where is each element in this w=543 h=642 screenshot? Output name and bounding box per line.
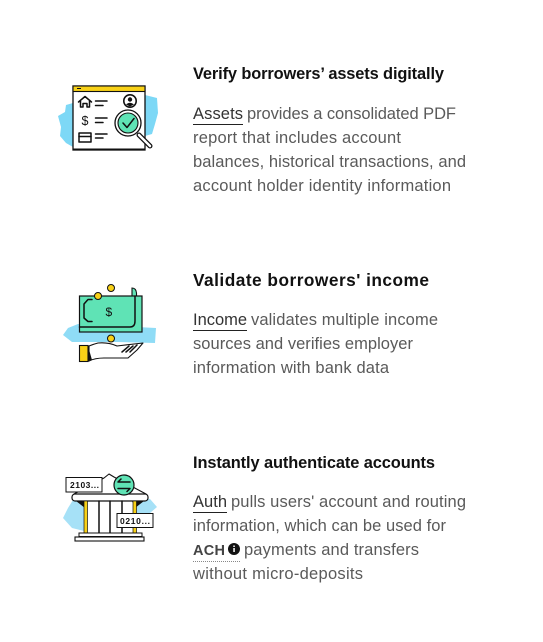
icon: bank with transfer: 2103...: [70, 480, 99, 490]
text block: assets: balances, historical transactions, and: [193, 153, 466, 171]
text block: income: Income: [193, 311, 247, 329]
panel: income: [63, 270, 438, 377]
text block: auth: Auth: [193, 493, 227, 511]
panel: assets: [58, 65, 466, 195]
heading: auth: Instantly authenticate accounts: [193, 454, 435, 472]
text block: auth: information, which can be used for: [193, 517, 446, 535]
text block: assets: report that includes account: [193, 129, 401, 147]
text block: assets: [193, 105, 466, 195]
text block: auth: ACH: [193, 543, 225, 559]
panel: auth: [63, 454, 466, 583]
text block: assets: provides a consolidated PDF: [247, 105, 456, 123]
text block: assets: account holder identity information: [193, 177, 451, 195]
text block: auth: without micro-deposits: [192, 565, 363, 583]
text block: income: [193, 311, 438, 377]
icon: cash and hand: [63, 284, 156, 362]
text block: income: sources and verifies employer: [193, 335, 414, 353]
icon: bank with transfer: 0210...: [120, 516, 150, 526]
heading: income: Validate borrowers' income: [193, 270, 429, 290]
icon: assets report with magnifier: [58, 86, 158, 150]
icon: cash and hand: $: [106, 305, 112, 319]
text block: income: validates multiple income: [251, 311, 438, 329]
text block: assets: Assets: [193, 105, 243, 123]
icon: assets report with magnifier: $: [82, 114, 88, 128]
text block: auth: [192, 493, 466, 583]
text block: auth: pulls users' account and routing: [231, 493, 466, 511]
text block: income: information with bank data: [193, 359, 390, 377]
text block: auth: payments and transfers: [244, 541, 419, 559]
icon: info: [228, 543, 240, 555]
icon: bank with transfer: [63, 474, 157, 541]
heading: assets: Verify borrowers’ assets digitally: [193, 65, 445, 83]
